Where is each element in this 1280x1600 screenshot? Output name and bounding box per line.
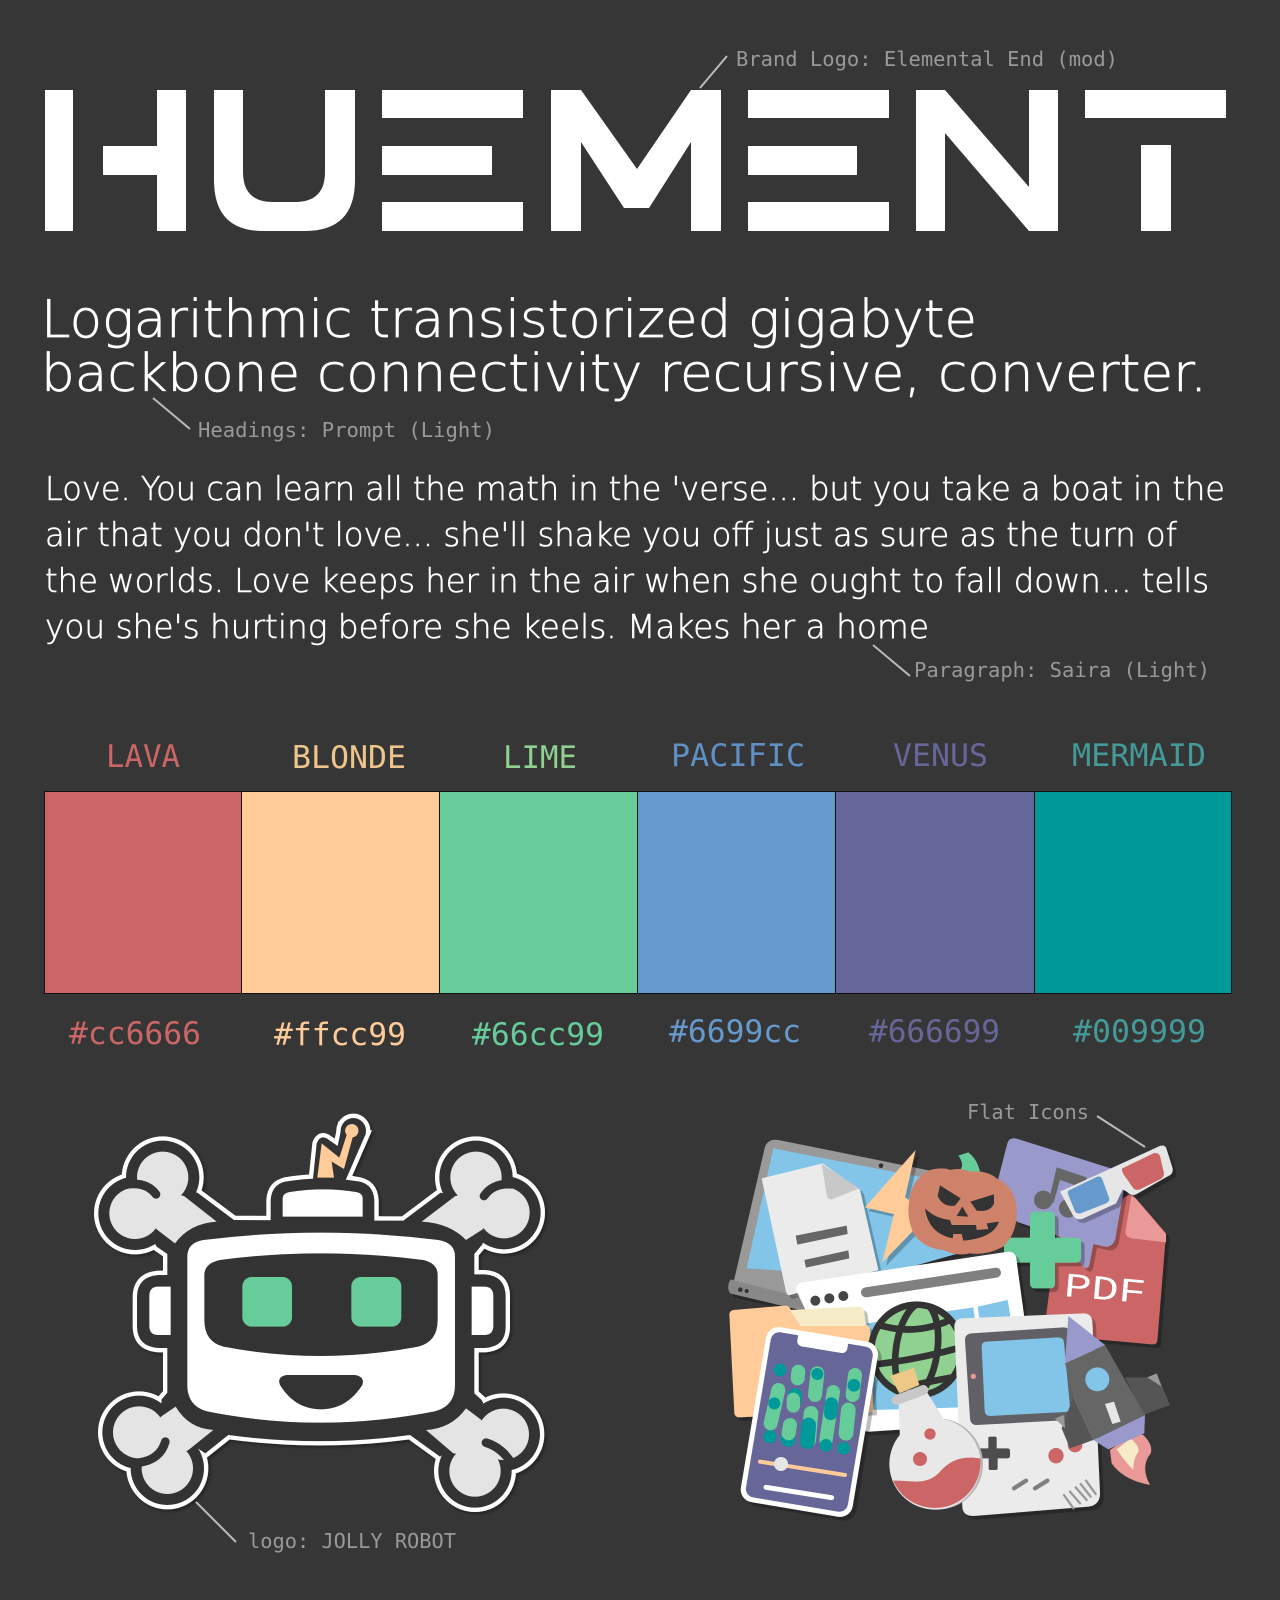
annotation: flat icons: Flat Icons xyxy=(967,1100,1089,1124)
letter N xyxy=(916,90,1058,231)
swatch: lime xyxy=(440,792,638,994)
icon: lightning xyxy=(865,1150,930,1262)
paragraph: you she's hurting before she keels. Makes her a home xyxy=(45,607,929,646)
letter E (bars) xyxy=(382,90,523,231)
bone: top right xyxy=(422,1152,530,1240)
flat icon collage xyxy=(728,1138,1173,1519)
icon: laptop xyxy=(728,1140,977,1312)
letter T xyxy=(1085,90,1226,231)
hex: blonde: #ffcc99 xyxy=(274,1017,406,1053)
icon: 3d glasses xyxy=(1060,1145,1173,1219)
ear: right xyxy=(472,1287,493,1335)
annotation: flat icons xyxy=(967,1100,1145,1147)
icon: pdf file: PDF xyxy=(1062,1268,1147,1314)
logo: jolly robot xyxy=(98,1118,541,1508)
letter M xyxy=(551,90,721,231)
mouth xyxy=(279,1375,363,1409)
annotation: brand logo: Brand Logo: Elemental End (mod) xyxy=(736,47,1118,71)
icon: phone xyxy=(739,1325,880,1519)
hex: lava: #cc6666 xyxy=(69,1016,201,1052)
icon: music bubble xyxy=(998,1138,1127,1268)
paragraph: the worlds. Love keeps her in the air when she ought to fall down... tells xyxy=(45,561,1209,600)
swatch: blonde xyxy=(242,792,440,994)
icon: rocket xyxy=(1055,1316,1170,1485)
hex: pacific: #6699cc xyxy=(669,1014,801,1050)
icon: plus xyxy=(1004,1212,1081,1288)
icon: game console xyxy=(954,1313,1100,1516)
antenna xyxy=(317,1124,358,1178)
ear: left xyxy=(149,1287,171,1335)
bone: bottom left xyxy=(113,1406,213,1494)
brand wordmark: HUEMENT xyxy=(45,90,1226,231)
annotation: paragraph: Paragraph: Saira (Light) xyxy=(914,658,1210,682)
icon: document xyxy=(762,1163,878,1295)
paragraph xyxy=(45,469,1225,646)
name: lava: LAVA xyxy=(106,739,180,775)
swatch: lava xyxy=(44,792,242,994)
icon: folder xyxy=(729,1306,873,1417)
heading: Logarithmic transistorized gigabyte xyxy=(41,290,977,350)
name: venus: VENUS xyxy=(893,738,988,774)
icon: flask xyxy=(889,1368,983,1510)
annotation: headings: Headings: Prompt (Light) xyxy=(198,418,495,442)
heading: backbone connectivity recursive, converter. xyxy=(41,344,1207,404)
swatch: venus xyxy=(836,792,1034,994)
name: mermaid: MERMAID xyxy=(1072,738,1206,774)
sticker outline xyxy=(98,1118,541,1508)
antenna cap xyxy=(283,1189,363,1217)
hex: mermaid: #009999 xyxy=(1073,1014,1206,1050)
bone: bottom right xyxy=(426,1408,529,1497)
annotation: paragraph xyxy=(873,645,1210,682)
paragraph: Love. You can learn all the math in the 'verse... but you take a boat in the xyxy=(45,469,1225,508)
name: lime: LIME xyxy=(503,740,577,776)
annotation: headings xyxy=(153,398,495,442)
eye: right xyxy=(351,1277,401,1327)
annotation: logo xyxy=(196,1502,456,1553)
colour swatches xyxy=(44,792,1232,994)
hex codes xyxy=(69,1014,1206,1053)
swatch: pacific xyxy=(638,792,836,994)
icon: browser window xyxy=(796,1252,1038,1432)
heading xyxy=(41,290,1207,404)
hex: lime: #66cc99 xyxy=(472,1017,604,1053)
letter H xyxy=(45,90,186,231)
icon: pdf file xyxy=(1044,1193,1166,1344)
hex: venus: #666699 xyxy=(869,1014,1000,1050)
icon: globe xyxy=(870,1300,963,1400)
icon: pumpkin xyxy=(908,1152,1017,1254)
head xyxy=(187,1233,455,1423)
colour names xyxy=(106,738,1206,776)
name: pacific: PACIFIC xyxy=(671,738,805,774)
letter E (bars) second xyxy=(748,90,889,231)
visor xyxy=(204,1253,438,1356)
eye: left xyxy=(242,1277,292,1327)
paragraph: air that you don't love... she'll shake you off just as sure as the turn of xyxy=(45,515,1177,554)
annotation: brand logo xyxy=(700,47,1118,88)
name: blonde: BLONDE xyxy=(292,740,406,776)
bone: top left xyxy=(109,1152,217,1243)
annotation: logo: logo: JOLLY ROBOT xyxy=(248,1529,456,1553)
swatch: mermaid xyxy=(1034,792,1232,994)
letter U xyxy=(214,90,355,231)
